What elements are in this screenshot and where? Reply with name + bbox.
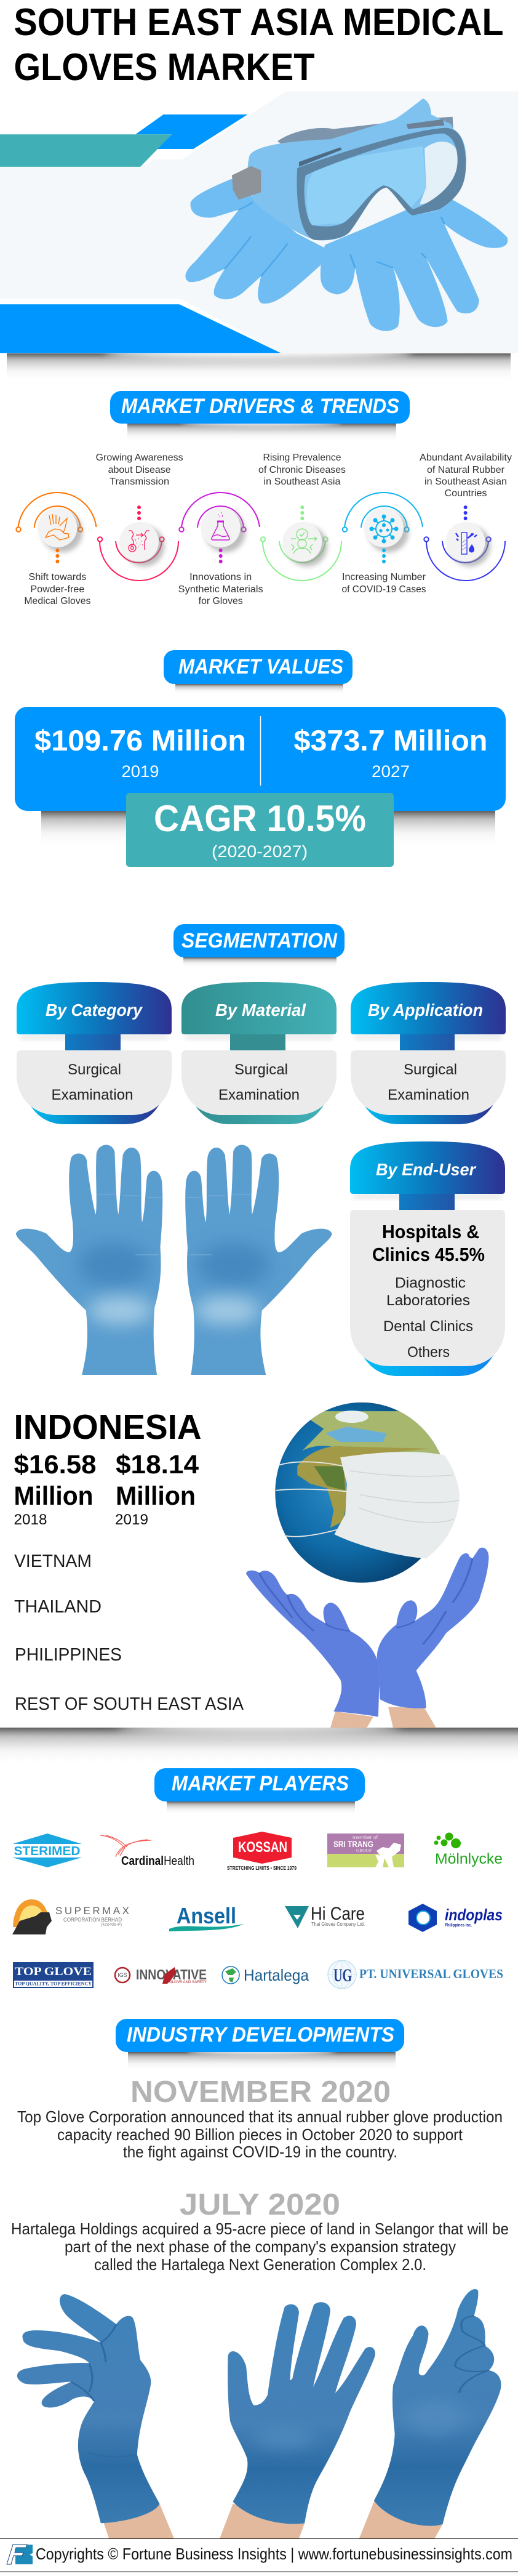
face mask bbox=[276, 1452, 460, 1558]
value 2027: $373.7 Million bbox=[294, 724, 487, 757]
logo: Indoplas: Philippines Inc. bbox=[445, 1922, 472, 1928]
logo: Top Glove: TOP QUALITY, TOP EFFICIENCY bbox=[15, 1981, 92, 1986]
image: left glove bbox=[185, 179, 325, 304]
middle glove bbox=[228, 2302, 375, 2524]
section heading: industry developments: INDUSTRY DEVELOPMENTS bbox=[127, 2023, 394, 2047]
text: about Disease bbox=[108, 465, 171, 475]
icon disc bbox=[38, 508, 82, 552]
hero shadow bbox=[7, 347, 511, 380]
text: Synthetic Materials bbox=[178, 584, 263, 595]
globe bbox=[275, 1403, 440, 1583]
image: right glove bbox=[321, 195, 508, 331]
text: Rising Prevalence bbox=[263, 453, 341, 463]
icon: flask bbox=[212, 513, 229, 540]
right glove bbox=[185, 1145, 332, 1375]
band shadow bbox=[0, 1720, 518, 1763]
text: Abundant Availability bbox=[420, 453, 512, 463]
value 2019: 2019 bbox=[115, 1511, 148, 1528]
regions text: Indonesia lead: INDONESIA bbox=[14, 1407, 202, 1447]
logo: Molnlycke bbox=[434, 1832, 503, 1867]
text bbox=[258, 453, 346, 487]
logo: Hi Care bbox=[285, 1904, 365, 1928]
text: Increasing Number bbox=[342, 572, 426, 582]
driver: disease transmission awareness bbox=[96, 453, 183, 581]
regions list: VIETNAM bbox=[14, 1552, 92, 1571]
left gloved hand bbox=[246, 1571, 379, 1717]
logo: Molnlycke: Mölnlycke bbox=[435, 1851, 503, 1867]
logo: Innovative: INNOVATIVE bbox=[136, 1966, 207, 1982]
logo: Hi Care: Hi Care bbox=[311, 1904, 365, 1924]
card: by application: Surgical bbox=[404, 1061, 457, 1078]
card: by category: By Category bbox=[46, 1000, 143, 1020]
dots bbox=[137, 505, 141, 520]
left glove bbox=[17, 2294, 159, 2523]
icon: faces with droplets bbox=[129, 531, 149, 552]
driver: chronic diseases bbox=[258, 453, 346, 581]
icon: clasped hands bbox=[46, 514, 69, 540]
section heading: market players bbox=[154, 1768, 365, 1814]
panel: hero background bbox=[0, 91, 518, 353]
card: by material: Surgical bbox=[234, 1061, 288, 1078]
section heading: market values: MARKET VALUES bbox=[178, 655, 343, 678]
value 2019: Million bbox=[116, 1481, 196, 1511]
development: July 2020: called the Hartalega Next Generation Complex 2.0. bbox=[94, 2255, 426, 2274]
logo: Indoplas bbox=[408, 1904, 503, 1932]
value 2019 bbox=[34, 724, 246, 781]
development: November 2020 bbox=[17, 2075, 503, 2161]
card: by category: Surgical bbox=[68, 1061, 121, 1078]
text: of Chronic Diseases bbox=[258, 465, 346, 475]
text bbox=[178, 572, 263, 606]
regions list bbox=[14, 1552, 244, 1714]
card: by category: Examination bbox=[52, 1087, 133, 1103]
value 2019: $18.14 bbox=[116, 1450, 199, 1479]
driver: powder-free gloves bbox=[16, 493, 96, 606]
arc rings bbox=[343, 493, 423, 532]
logo: Supermax: CORPORATION BERHAD bbox=[63, 1917, 122, 1923]
card: by application: By Application bbox=[368, 1000, 483, 1020]
arc rings bbox=[179, 493, 260, 532]
section heading: market drivers and trends bbox=[110, 391, 410, 441]
driver: innovations in synthetic materials bbox=[178, 493, 263, 606]
text bbox=[24, 572, 91, 606]
left glove bbox=[16, 1145, 162, 1375]
text: of Natural Rubber bbox=[427, 465, 504, 475]
card: by end-user: Dental Clinics bbox=[383, 1318, 473, 1335]
dots bbox=[219, 549, 223, 563]
card: by end-user: Clinics 45.5% bbox=[372, 1244, 485, 1265]
logo: Supermax: SUPERMAX bbox=[55, 1905, 129, 1917]
logo: Supermax bbox=[12, 1899, 129, 1934]
illustration: masked globe and gloved hands bbox=[246, 1403, 488, 1728]
hero banner bbox=[0, 91, 518, 353]
logo: Sri Trang bbox=[327, 1833, 404, 1867]
shape: lower blue band bbox=[0, 304, 281, 353]
value 2027: 2027 bbox=[372, 762, 410, 781]
logo: Kossan bbox=[227, 1832, 297, 1871]
regions list: THAILAND bbox=[14, 1597, 102, 1617]
logo: Sterimed bbox=[12, 1833, 82, 1867]
text bbox=[96, 453, 183, 487]
logo: Kossan: KOSSAN bbox=[238, 1839, 287, 1856]
logo: Sterimed: STERIMED bbox=[14, 1845, 80, 1858]
regions list: PHILIPPINES bbox=[15, 1645, 122, 1665]
shape: teal band bbox=[0, 134, 172, 167]
text: Innovations in bbox=[189, 572, 252, 582]
logo: Innovative: GLOVE AND SAFETY bbox=[169, 1981, 207, 1984]
text: for Gloves bbox=[199, 596, 243, 606]
development: November 2020: NOVEMBER 2020 bbox=[130, 2075, 391, 2109]
icon: company logo bbox=[7, 2545, 33, 2564]
logo: Innovative: IGS bbox=[118, 1972, 127, 1978]
development: November 2020: the fight against COVID-19 in the country. bbox=[123, 2143, 397, 2161]
icon: rubber tree with drop bbox=[456, 533, 477, 554]
value 2027 bbox=[294, 724, 487, 781]
arc rings bbox=[16, 493, 96, 532]
text bbox=[420, 453, 512, 499]
logo: Sri Trang: GROUP bbox=[356, 1848, 372, 1853]
card: by end-user: Diagnostic bbox=[395, 1274, 466, 1292]
icon: virus bbox=[370, 515, 398, 543]
section heading: market drivers and trends: MARKET DRIVERS & TRENDS bbox=[121, 395, 399, 418]
title bbox=[14, 1, 503, 89]
value 2018: $16.58 bbox=[14, 1450, 96, 1479]
market values panel bbox=[15, 707, 506, 867]
logo: Sri Trang: SRI TRANG bbox=[333, 1839, 373, 1849]
right glove bbox=[374, 2289, 501, 2526]
logo: Hartalega: Hartalega bbox=[244, 1966, 309, 1984]
text: in Southeast Asian bbox=[424, 477, 507, 487]
section heading: market values bbox=[164, 650, 353, 694]
footer bbox=[0, 2538, 518, 2572]
logo: Hi Care: Thai Gloves Company Ltd. bbox=[311, 1922, 365, 1927]
regions text: Indonesia lead bbox=[14, 1407, 202, 1528]
skin forearms bbox=[330, 1707, 436, 1728]
callout: CAGR: CAGR 10.5% bbox=[154, 798, 366, 839]
text: Countries bbox=[444, 488, 487, 499]
text: Shift towards bbox=[28, 572, 87, 582]
logo: Sri Trang: member of bbox=[353, 1835, 378, 1840]
card: by application: Examination bbox=[388, 1087, 469, 1103]
development: July 2020 bbox=[11, 2188, 509, 2274]
icon disc bbox=[364, 508, 408, 552]
development: July 2020: part of the next phase of the company's expansion strategy bbox=[65, 2237, 456, 2256]
card: by material: By Material bbox=[215, 1000, 306, 1020]
value 2018 bbox=[14, 1450, 96, 1528]
card: by end-user: By End-User bbox=[376, 1160, 477, 1179]
logo: PT Universal Gloves: PT. UNIVERSAL GLOVES bbox=[359, 1966, 503, 1981]
section heading: segmentation: SEGMENTATION bbox=[181, 929, 338, 952]
text: of COVID-19 Cases bbox=[342, 584, 426, 595]
title: GLOVES MARKET bbox=[14, 46, 315, 89]
logo: Cardinal Health bbox=[100, 1835, 194, 1868]
dots bbox=[300, 505, 304, 520]
dots bbox=[382, 549, 386, 563]
card: by end-user bbox=[350, 1141, 505, 1376]
image: goggles bbox=[232, 99, 466, 240]
icon disc bbox=[446, 522, 490, 566]
logo: Indoplas: indoplas bbox=[445, 1906, 503, 1924]
logo: Top Glove bbox=[13, 1962, 94, 1988]
dots bbox=[55, 549, 59, 563]
callout: CAGR: (2020-2027) bbox=[212, 842, 308, 861]
card: by material bbox=[181, 982, 337, 1124]
illustration: pair of blue gloves bbox=[16, 1145, 332, 1375]
driver: covid-19 cases bbox=[342, 493, 426, 595]
card: by end-user: Hospitals & bbox=[382, 1221, 479, 1242]
arc rings bbox=[98, 537, 178, 581]
logo: PT Universal Gloves: UG bbox=[333, 1965, 352, 1986]
development: July 2020: JULY 2020 bbox=[180, 2188, 340, 2221]
value 2019: 2019 bbox=[122, 762, 159, 781]
value 2018: 2018 bbox=[14, 1511, 47, 1528]
card: by material: Examination bbox=[218, 1087, 300, 1103]
text: Medical Gloves bbox=[24, 596, 91, 606]
panel shadow bbox=[41, 811, 495, 845]
text: Transmission bbox=[110, 477, 169, 487]
shape: upper blue band bbox=[135, 115, 248, 149]
card: by category bbox=[17, 982, 172, 1124]
right gloved hand bbox=[377, 1548, 488, 1709]
dots bbox=[464, 505, 468, 520]
value 2019: $109.76 Million bbox=[34, 724, 246, 757]
logo: Innovative bbox=[115, 1966, 207, 1984]
section heading: industry developments bbox=[116, 2019, 404, 2070]
card: by end-user: Others bbox=[407, 1344, 450, 1361]
logo: Kossan: STRETCHING LIMITS • SINCE 1979 bbox=[227, 1865, 297, 1871]
icon: clock and stressed person bbox=[291, 529, 317, 553]
text: in Southeast Asia bbox=[263, 477, 341, 487]
logo: Cardinal Health: CardinalHealth bbox=[121, 1854, 194, 1868]
development: November 2020: capacity reached 90 Billion pieces in October 2020 to support bbox=[57, 2125, 463, 2144]
callout: CAGR bbox=[126, 793, 394, 867]
text: Powder-free bbox=[30, 584, 84, 595]
arc rings bbox=[261, 537, 341, 581]
card: by application bbox=[351, 982, 506, 1124]
section heading: market players: MARKET PLAYERS bbox=[172, 1772, 349, 1795]
logo: PT Universal Gloves bbox=[328, 1960, 503, 1989]
forearms bbox=[103, 2502, 443, 2538]
text bbox=[342, 572, 426, 595]
logo: Supermax: (420405-P) bbox=[101, 1923, 122, 1927]
logo: Ansell: Ansell bbox=[177, 1903, 236, 1928]
panel: blue values box bbox=[15, 707, 506, 811]
illustration: three gloved hands bbox=[17, 2289, 501, 2538]
value 2019 bbox=[115, 1450, 199, 1528]
section heading: segmentation bbox=[173, 924, 345, 967]
arc rings bbox=[424, 537, 505, 581]
card: by end-user: Laboratories bbox=[386, 1292, 470, 1309]
driver: natural rubber bbox=[420, 453, 512, 581]
logo: Top Glove: TOP GLOVE bbox=[15, 1965, 92, 1978]
text: Growing Awareness bbox=[96, 453, 183, 463]
value 2018: Million bbox=[14, 1481, 94, 1511]
icon disc bbox=[282, 522, 327, 566]
icon disc bbox=[201, 508, 245, 552]
regions list: REST OF SOUTH EAST ASIA bbox=[15, 1694, 244, 1714]
icon disc bbox=[119, 522, 164, 566]
